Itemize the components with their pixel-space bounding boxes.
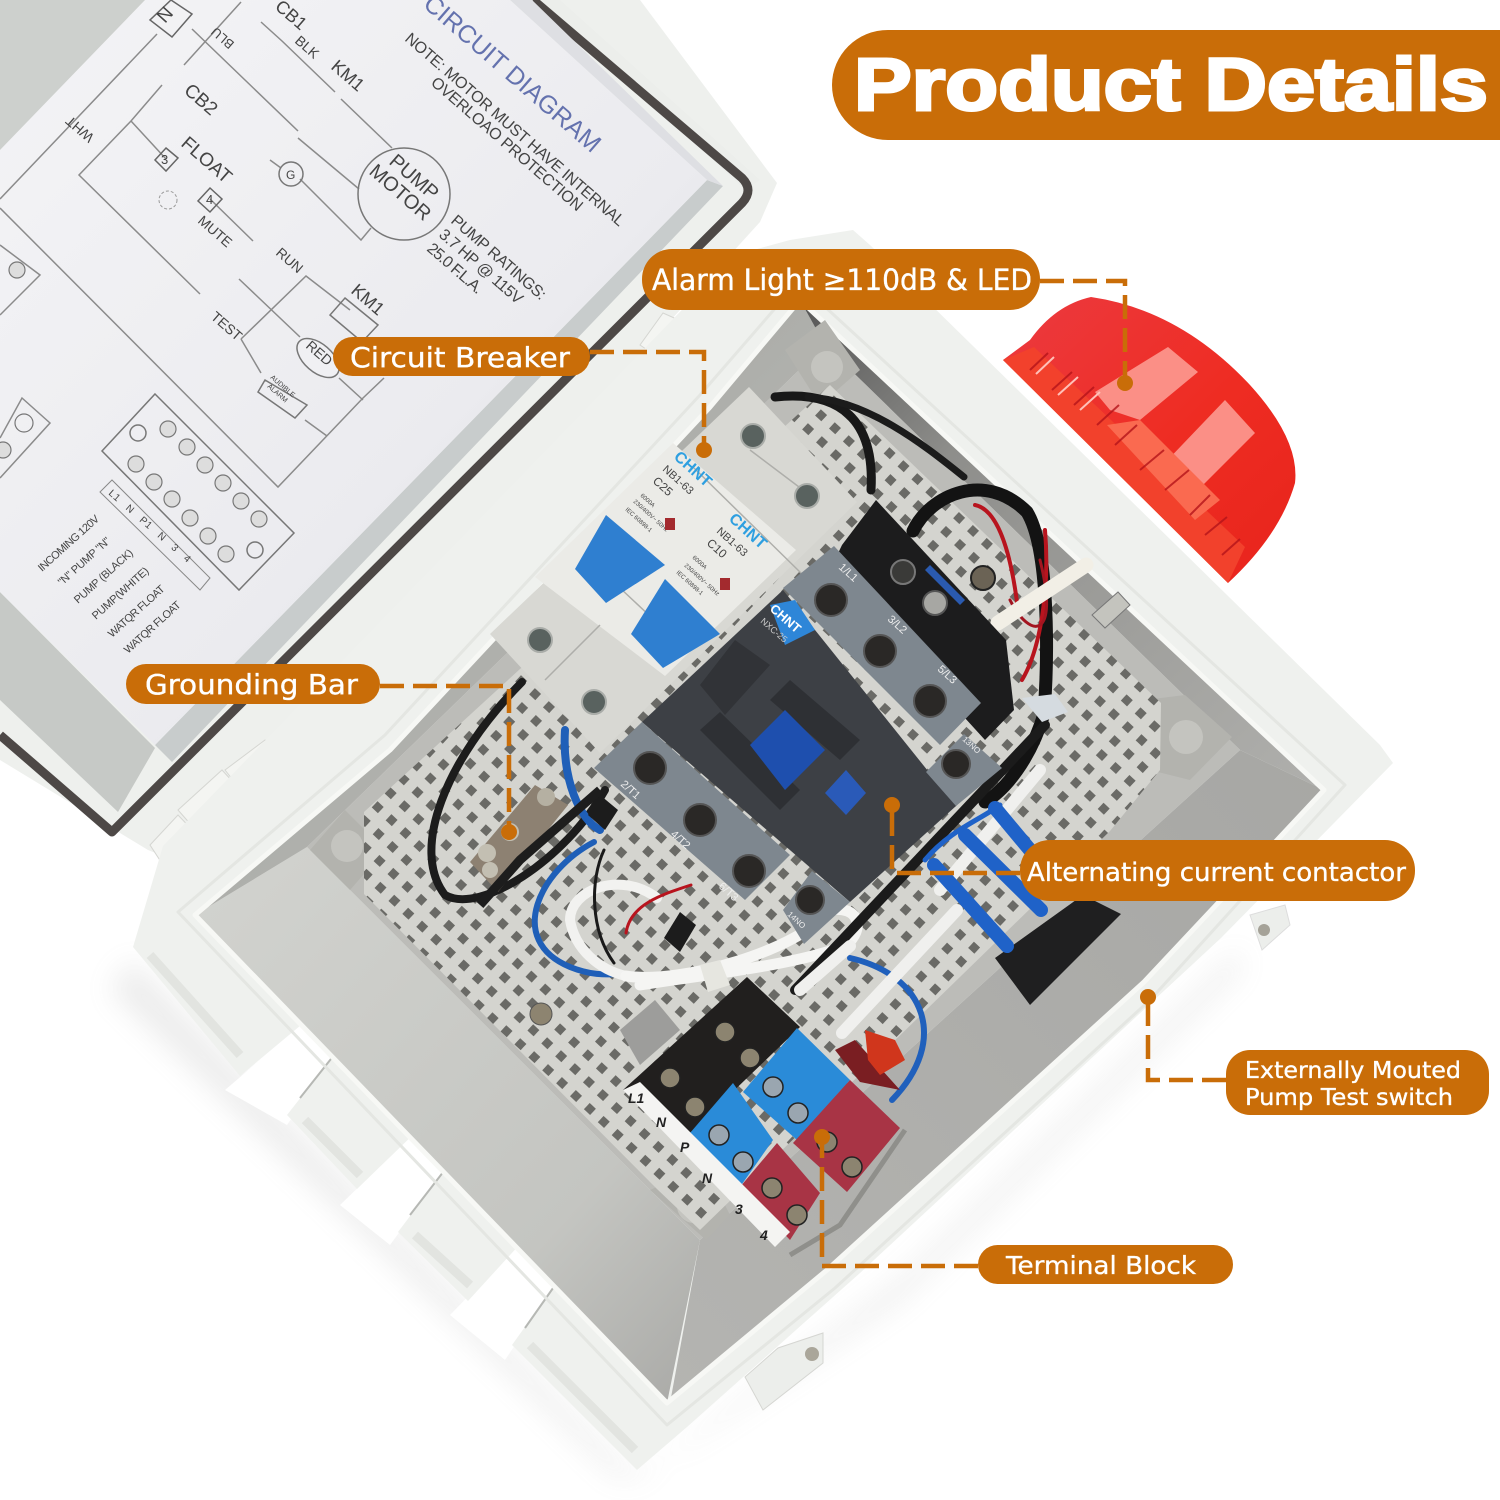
interior wall lower right xyxy=(670,750,1324,1403)
callout: terminal block xyxy=(814,1129,1233,1284)
callout: circuit breaker xyxy=(333,337,712,458)
marker letters: L1 xyxy=(628,1090,645,1106)
grounding bar xyxy=(470,785,600,905)
mounting bosses xyxy=(331,351,1203,1223)
cable tie right xyxy=(1022,694,1068,722)
lid hasp right xyxy=(1250,905,1290,950)
callout: externally mounted pump test switch xyxy=(1140,989,1489,1115)
circuit schematic: G xyxy=(286,168,295,182)
enclosure body xyxy=(133,230,1393,1470)
terminal wiring labels: INCOMING 120V xyxy=(36,513,102,574)
breaker labels C25: IEC 60898-1 xyxy=(624,507,653,534)
circuit schematic: AUDIBLE xyxy=(269,374,296,399)
circuit schematic: BLK xyxy=(292,32,323,62)
breaker handle C25 xyxy=(575,515,665,603)
breaker labels C10: C10 xyxy=(704,536,730,561)
rim ridge xyxy=(195,300,1324,1403)
marker letters: N xyxy=(702,1170,713,1186)
red fuse cap xyxy=(865,1030,905,1075)
black terminals xyxy=(623,977,800,1133)
blue terminals xyxy=(690,1083,773,1187)
circuit schematic: MUTE xyxy=(195,212,235,250)
breaker labels C25: 6000A xyxy=(639,493,656,509)
pump ratings: 3.7 HP @ 115V xyxy=(435,226,526,308)
circuit schematic: WHT xyxy=(62,113,97,146)
contactor terminal labels: 6/T3 xyxy=(716,880,740,904)
callout: grounding bar xyxy=(126,664,517,840)
callout: terminal block: Terminal Block xyxy=(1005,1251,1197,1280)
callout: externally mounted pump test switch: Pump Test switch xyxy=(1245,1085,1453,1111)
lamp flange xyxy=(1003,347,1245,583)
alarm light dome xyxy=(1003,297,1295,583)
contactor terminal labels: 3/L2 xyxy=(885,613,909,637)
breaker labels C10: 230/400V~ 50Hz xyxy=(683,563,720,598)
marker letters: P xyxy=(680,1139,690,1155)
circuit schematic: KM1 xyxy=(347,280,388,319)
circuit schematic: MOTOR xyxy=(365,160,435,225)
dark red backing xyxy=(835,1040,900,1090)
circuit schematic: 4 xyxy=(206,192,213,207)
title banner xyxy=(832,30,1500,140)
red terminals xyxy=(740,1143,820,1240)
callout: grounding bar: Grounding Bar xyxy=(145,668,359,701)
breaker screws xyxy=(528,424,819,714)
wire crimp connectors xyxy=(925,805,1041,946)
callout: externally mounted pump test switch: Externally Mouted xyxy=(1245,1058,1461,1084)
circuit breakers xyxy=(490,387,857,753)
terminal wiring labels: WATQR FLOAT xyxy=(106,583,168,640)
contactor brand badge: CHNT xyxy=(767,601,804,636)
circuit schematic: PUMP xyxy=(385,150,443,205)
breaker labels C25: 230/400V~ 50Hz xyxy=(632,499,669,534)
contactor brand badge: NXC-25 xyxy=(759,616,789,645)
circuit schematic: KM1 xyxy=(327,56,368,95)
breaker labels C25 xyxy=(624,448,715,534)
circuit schematic: BLU xyxy=(208,24,237,52)
notch openings xyxy=(225,1015,565,1360)
marker letters: 4 xyxy=(759,1227,768,1243)
contactor screws xyxy=(634,584,970,914)
contactor upper terminal strip xyxy=(783,546,981,745)
breaker labels C25: NB1-63 xyxy=(660,463,696,497)
wire ferrules at contactor xyxy=(588,795,696,952)
contactor terminal labels: 5/L3 xyxy=(935,663,959,687)
terminal wiring labels: WATQR FLOAT xyxy=(122,599,184,656)
circuit schematic: FLOAT xyxy=(177,133,236,188)
breaker handle C10 xyxy=(631,579,720,668)
circuit schematic: RUN xyxy=(273,244,306,276)
upper contactor terminals block xyxy=(830,500,1014,740)
callout: alternating current contactor xyxy=(884,797,1415,901)
pump ratings: PUMP RATINGS: xyxy=(447,212,549,304)
lid gasket xyxy=(0,0,748,832)
terminal block xyxy=(620,977,905,1255)
interior wall upper left xyxy=(195,300,825,915)
interior wall upper right xyxy=(800,300,1324,790)
test switch housing xyxy=(995,895,1121,1005)
terminal strip drawing xyxy=(0,245,294,590)
circuit schematic: N xyxy=(153,3,178,27)
pump ratings: 25.0 F.L.A. xyxy=(423,240,486,298)
marker letters xyxy=(628,1090,768,1243)
breaker labels C10: 6000A xyxy=(691,555,708,571)
lamp highlight bands xyxy=(1095,347,1255,507)
lid hasp lower xyxy=(745,1333,823,1410)
contactor blue indicator xyxy=(825,770,866,815)
terminal wiring labels: PUMP(WHITE) xyxy=(90,565,152,622)
callout: circuit breaker: Circuit Breaker xyxy=(350,341,571,374)
breaker labels C25: CHNT xyxy=(670,448,715,491)
motor note: OVERLOAO PROTECTION xyxy=(427,74,586,215)
circuit schematic: RED xyxy=(303,337,336,369)
metal rail xyxy=(790,1130,905,1255)
breaker labels C10: NB1-63 xyxy=(714,525,750,559)
circuit schematic: CB2 xyxy=(180,80,221,120)
breaker labels C10 xyxy=(675,510,770,598)
contactor auxiliary block lower xyxy=(783,871,850,944)
enclosure floor xyxy=(307,345,1240,1240)
contactor xyxy=(594,546,1002,944)
circuit schematic: TEST xyxy=(208,308,246,344)
contactor terminal labels: 14NO xyxy=(786,910,807,930)
perforated back plate xyxy=(364,385,1161,1230)
callout: alarm light xyxy=(642,249,1133,391)
terminal wiring labels: PUMP (BLACK) xyxy=(72,547,136,606)
marker letters: N xyxy=(656,1114,667,1130)
motor note: NOTE: MOTOR MUST HAVE INTERNAL xyxy=(401,30,628,230)
title text: Product Details xyxy=(854,43,1488,126)
internal wires xyxy=(431,396,1086,1100)
breaker labels C25: C25 xyxy=(650,474,676,499)
terminal screws xyxy=(660,1022,862,1225)
plate screw xyxy=(530,1003,552,1025)
marker letters: 3 xyxy=(735,1201,743,1217)
side bolt xyxy=(1092,592,1130,628)
callout: alarm light: Alarm Light ≥110dB & LED xyxy=(652,263,1032,297)
breaker labels C10: IEC 60898-1 xyxy=(675,570,704,597)
callout: alternating current contactor: Alternating current contactor xyxy=(1027,858,1406,888)
interior wall lower left xyxy=(195,847,700,1403)
wiring diagram paper xyxy=(0,0,723,762)
enclosure shadow xyxy=(110,950,1240,1480)
plate mounting corners xyxy=(310,320,1232,1240)
breaker labels C10: CHNT xyxy=(725,510,770,553)
terminal wiring labels: "N" PUMP "N" xyxy=(56,535,113,588)
contactor terminal labels: 4/T2 xyxy=(668,828,692,852)
contactor terminal labels: 1/L1 xyxy=(836,561,860,585)
contactor terminal labels: 13NO xyxy=(961,735,982,755)
circuit schematic xyxy=(0,0,450,487)
lid hinge knuckles xyxy=(150,313,707,868)
contactor terminal labels: 2/T1 xyxy=(618,778,642,802)
terminal strip drawing: L1 N P1 N 3 4 xyxy=(106,488,193,565)
white marker strip xyxy=(623,1082,790,1247)
circuit schematic: ALARM xyxy=(266,383,289,404)
tab ridges xyxy=(150,955,635,1450)
contactor blue test button xyxy=(750,710,825,790)
contactor lower terminal strip xyxy=(594,722,790,900)
contactor inner raised blocks xyxy=(700,640,770,715)
circuit schematic: 3 xyxy=(161,152,168,167)
cable tie lower xyxy=(700,960,730,992)
terminal wiring labels xyxy=(36,513,184,656)
grey end stop xyxy=(620,1000,680,1065)
contactor terminal labels xyxy=(618,561,982,930)
lamp ribs xyxy=(1030,353,1240,555)
notch edges xyxy=(300,1015,565,1328)
contactor auxiliary block upper xyxy=(926,734,1002,806)
contactor brand badge xyxy=(759,600,815,645)
enclosure lid xyxy=(0,0,777,868)
